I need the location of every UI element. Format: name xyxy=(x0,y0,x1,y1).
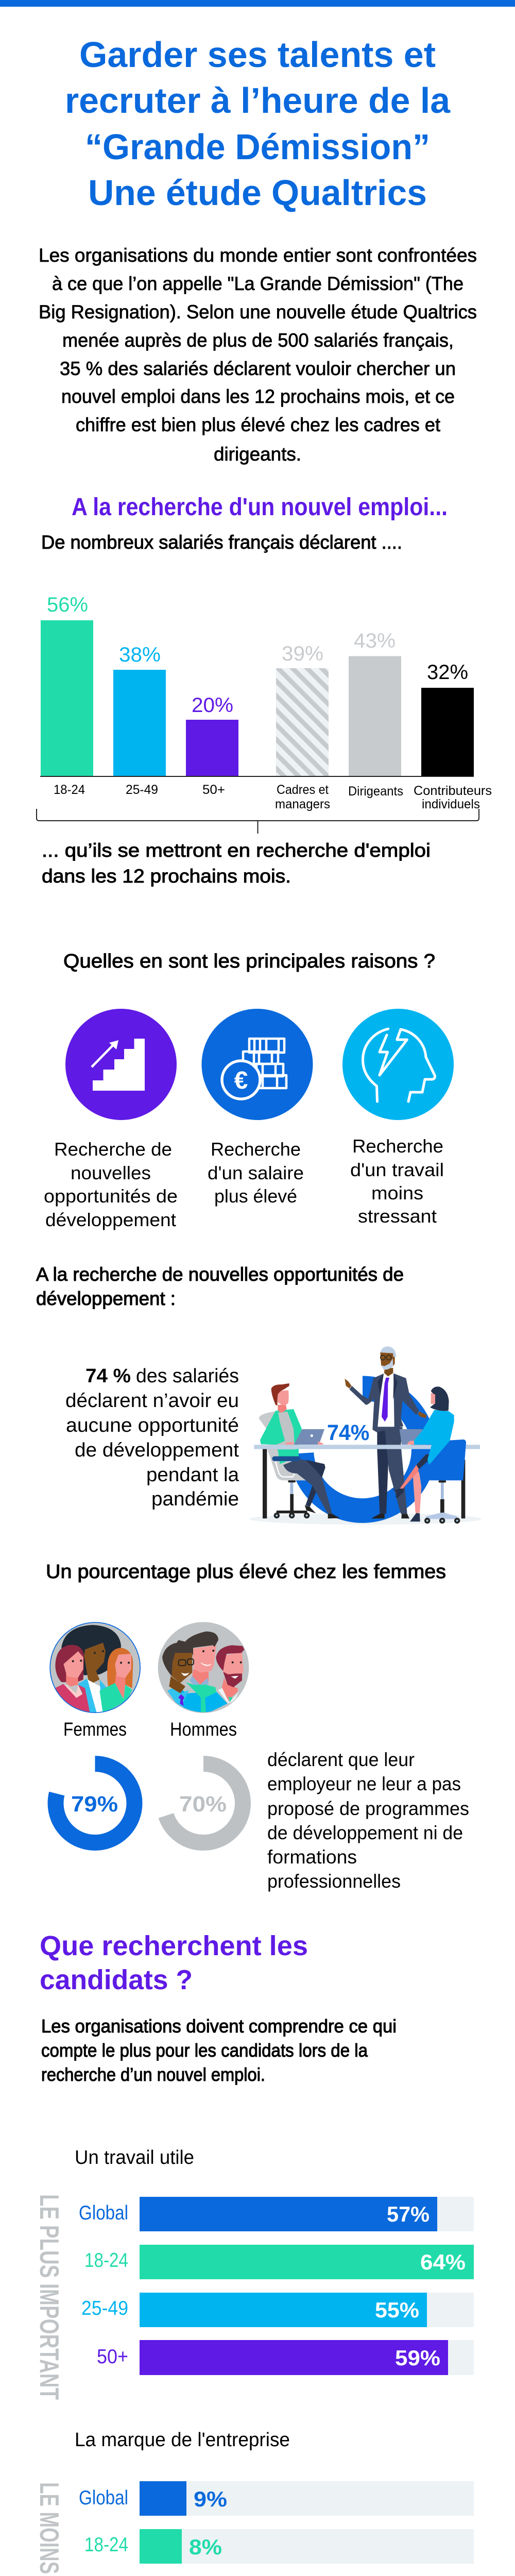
bar chart: job seekers by group: 25-49 xyxy=(126,783,158,797)
bar chart: job seekers by group: individuels xyxy=(422,797,480,811)
intro paragraph xyxy=(39,245,477,465)
intro paragraph: 35 % des salariés déclarent vouloir chercher un xyxy=(60,358,456,379)
bar chart: company brand: 18-24 xyxy=(84,2534,128,2556)
text: 74 percent statement: pendant la xyxy=(146,1464,239,1486)
text: 74 percent statement xyxy=(65,1365,239,1510)
donut: women 79% xyxy=(56,1764,134,1842)
heading: what candidates look for: Que recherchent les xyxy=(40,1930,308,1961)
chart title: meaningful work: Un travail utile xyxy=(75,2147,194,2168)
icon: men group portrait xyxy=(158,1622,249,1714)
icon: euro coin stack: € xyxy=(234,1067,248,1094)
chart title: company brand: La marque de l'entreprise xyxy=(75,2429,290,2451)
text: 74 percent statement: de développement xyxy=(75,1439,239,1461)
text: candidates intro: compte le plus pour les candidats lors de la xyxy=(41,2040,368,2061)
bar chart: meaningful work: 25-49 xyxy=(81,2297,128,2319)
text: 74 percent statement: des salariés xyxy=(136,1365,239,1387)
title: Une étude Qualtrics xyxy=(88,173,427,213)
bar chart: meaningful work xyxy=(79,2197,474,2375)
chart intro text: De nombreux salariés français déclarent .... xyxy=(41,532,402,553)
bar chart: job seekers by group: 50+ xyxy=(202,783,225,797)
text: employers statement: formations xyxy=(267,1846,357,1868)
labels: women and men: Hommes xyxy=(170,1719,237,1740)
text: candidates intro: recherche d’un nouvel emploi. xyxy=(41,2064,265,2085)
reason labels: Recherche de xyxy=(54,1139,172,1160)
heading: development opportunities xyxy=(36,1264,404,1309)
text: 74 percent statement: aucune opportunité xyxy=(66,1415,239,1436)
bar chart: job seekers by group xyxy=(40,594,492,811)
text: employers statement xyxy=(267,1749,469,1892)
text: 74 percent statement: déclarent n’avoir eu xyxy=(65,1390,239,1412)
bar chart: company brand xyxy=(79,2481,474,2576)
icon: stairs with arrow xyxy=(65,1009,177,1120)
text: 74 percent statement: pandémie xyxy=(151,1488,239,1510)
heading: main reasons: Quelles en sont les principales raisons ? xyxy=(63,951,435,972)
bar chart: company brand: Global xyxy=(79,2487,128,2509)
bar chart: job seekers by group: 43% xyxy=(354,630,396,652)
bar chart: meaningful work: 57% xyxy=(387,2202,430,2226)
bar chart: job seekers by group: 39% xyxy=(282,642,323,665)
chart conclusion text: ... qu’ils se mettront en recherche d'emploi xyxy=(42,840,431,861)
labels: women and men: Femmes xyxy=(63,1719,127,1740)
text: candidates intro: Les organisations doivent comprendre ce qui xyxy=(41,2015,397,2037)
heading: development opportunities: développement : xyxy=(36,1288,176,1309)
intro paragraph: Big Resignation). Selon une nouvelle étude Qualtrics xyxy=(39,301,477,323)
chart conclusion text xyxy=(42,840,431,887)
bar chart: job seekers by group: managers xyxy=(275,797,330,811)
reason labels: opportunités de xyxy=(44,1185,178,1207)
bar chart: job seekers by group: Contributeurs xyxy=(414,784,492,798)
chart conclusion text: dans les 12 prochains mois. xyxy=(42,866,291,887)
reason labels: d'un travail xyxy=(350,1159,444,1180)
heading: what candidates look for: candidats ? xyxy=(40,1964,193,1995)
bar chart: meaningful work: 59% xyxy=(395,2346,440,2370)
intro paragraph: menée auprès de plus de 500 salariés français, xyxy=(62,330,454,351)
bar chart: job seekers by group: 20% xyxy=(192,694,233,717)
text: employers statement: professionnelles xyxy=(267,1871,401,1892)
reason labels: moins xyxy=(371,1182,423,1204)
bar chart: meaningful work: 18-24 xyxy=(84,2249,128,2272)
icon: euro coin stack xyxy=(202,1009,313,1120)
donut: men 70% xyxy=(164,1764,243,1842)
intro paragraph: à ce que l’on appelle "La Grande Démission" (The xyxy=(52,273,464,294)
bar chart: company brand: 9% xyxy=(194,2487,227,2511)
bar chart: job seekers by group: 56% xyxy=(47,594,88,616)
title xyxy=(65,35,451,213)
intro paragraph: Les organisations du monde entier sont confrontées xyxy=(39,245,477,266)
heading: development opportunities: A la recherche de nouvelles opportunités de xyxy=(36,1264,404,1285)
bar chart: job seekers by group: 18-24 xyxy=(54,783,85,797)
bar chart: company brand: 8% xyxy=(189,2535,222,2559)
reason labels: développement xyxy=(45,1209,176,1230)
title: recruter à l’heure de la xyxy=(65,80,451,121)
icon: women group portrait xyxy=(49,1622,141,1713)
illustration: meeting with 74% ring: 74% xyxy=(327,1420,369,1445)
text: 74 percent statement: 74 % xyxy=(85,1365,131,1387)
bar chart: job seekers by group: 38% xyxy=(119,643,161,666)
illustration: meeting with 74% ring xyxy=(250,1346,482,1524)
reason labels: nouvelles xyxy=(71,1162,151,1183)
bar chart: job seekers by group: 32% xyxy=(427,661,468,684)
reason labels: Recherche xyxy=(352,1136,443,1157)
text: candidates intro xyxy=(41,2015,397,2085)
bar chart: job seekers by group: Cadres et xyxy=(277,783,329,797)
text: employers statement: employeur ne leur a pas xyxy=(267,1773,461,1794)
icon: head with lightning bolt xyxy=(342,1009,454,1120)
reason labels: d'un salaire xyxy=(208,1162,304,1183)
reason labels: stressant xyxy=(358,1206,437,1227)
reason labels: Recherche xyxy=(211,1139,301,1160)
text: employers statement: proposé de programmes xyxy=(267,1798,469,1819)
bracket xyxy=(37,809,479,834)
bar chart: meaningful work: 55% xyxy=(375,2298,419,2322)
donut: women 79%: 79% xyxy=(71,1792,118,1817)
intro paragraph: nouvel emploi dans les 12 prochains mois, et ce xyxy=(61,386,455,407)
heading: what candidates look for xyxy=(40,1930,308,1995)
bar chart: job seekers by group: Dirigeants xyxy=(348,784,403,799)
labels: women and men xyxy=(63,1719,237,1740)
text: employers statement: de développement ni de xyxy=(267,1822,463,1843)
side label: most important: LE PLUS IMPORTANT xyxy=(34,2194,64,2400)
title: “Grande Démission” xyxy=(85,127,430,167)
intro paragraph: chiffre est bien plus élevé chez les cadres et xyxy=(76,414,441,435)
reason labels: plus élevé xyxy=(214,1185,297,1207)
heading: job search: A la recherche d'un nouvel emploi... xyxy=(72,494,448,521)
title: Garder ses talents et xyxy=(79,35,436,75)
reason labels xyxy=(44,1136,444,1230)
donut: men 70%: 70% xyxy=(179,1792,227,1817)
intro paragraph: dirigeants. xyxy=(214,444,301,465)
text: employers statement: déclarent que leur xyxy=(267,1749,415,1770)
top accent bar xyxy=(0,0,515,7)
bar chart: meaningful work: 64% xyxy=(420,2250,466,2274)
heading: higher among women: Un pourcentage plus élevé chez les femmes xyxy=(46,1561,446,1583)
bar chart: meaningful work: 50+ xyxy=(97,2346,128,2368)
bar chart: meaningful work: Global xyxy=(79,2202,128,2224)
